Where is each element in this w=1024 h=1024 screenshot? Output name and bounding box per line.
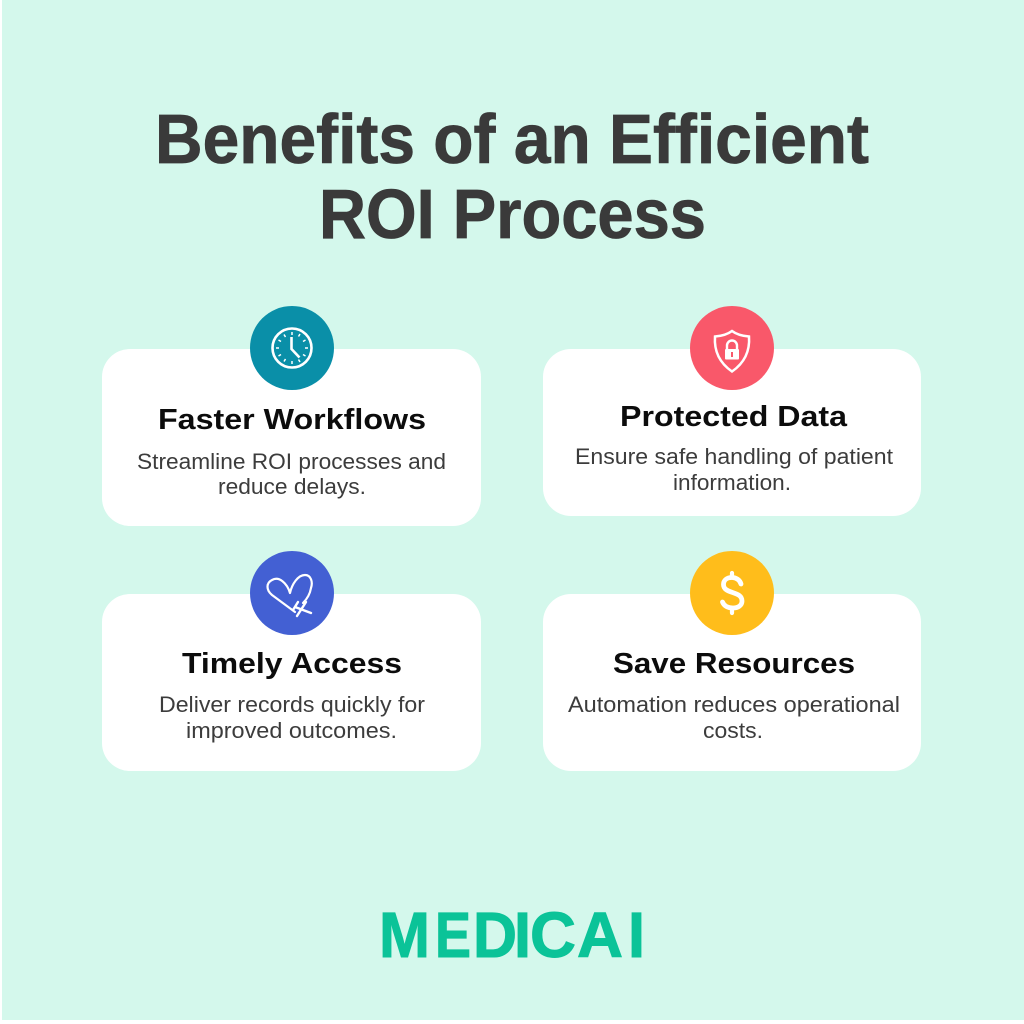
logo: Medicai wordmark: D — [473, 899, 517, 971]
logo: Medicai wordmark: I — [628, 899, 645, 971]
description: Deliver records quickly for — [159, 692, 425, 717]
description: Automation reduces operational — [568, 692, 900, 717]
panel: faster workflows — [102, 306, 481, 526]
heading: Timely Access — [182, 648, 402, 680]
description: costs. — [703, 718, 763, 743]
logo: Medicai wordmark: C — [530, 899, 576, 971]
icon: clock — [250, 306, 334, 390]
description — [568, 692, 900, 743]
title: Benefits of an Efficient — [155, 100, 869, 178]
description: Ensure safe handling of patient — [575, 444, 893, 469]
heading: Faster Workflows — [158, 404, 426, 436]
card background — [102, 349, 481, 526]
card background — [102, 594, 481, 771]
description — [159, 692, 425, 743]
logo: Medicai wordmark: A — [577, 899, 623, 971]
heading: Protected Data — [620, 401, 848, 433]
icon: shield with lock — [690, 306, 774, 390]
icon: heart with cross — [250, 551, 334, 635]
description: improved outcomes. — [186, 718, 397, 743]
description: reduce delays. — [218, 474, 366, 499]
heading: Save Resources — [613, 648, 855, 680]
icon: dollar sign — [690, 551, 774, 635]
logo: Medicai wordmark: M — [379, 899, 430, 971]
logo: Medicai wordmark: E — [435, 899, 471, 971]
panel: save resources — [543, 551, 921, 771]
panel: protected data — [543, 306, 921, 516]
title: ROI Process — [319, 175, 706, 253]
card background — [543, 594, 921, 771]
logo: Medicai wordmark: I — [514, 899, 531, 971]
title — [155, 100, 869, 253]
description — [575, 444, 893, 495]
description: information. — [673, 470, 791, 495]
card background — [543, 349, 921, 516]
description — [137, 449, 446, 499]
description: Streamline ROI processes and — [137, 449, 446, 474]
panel: timely access — [102, 551, 481, 771]
